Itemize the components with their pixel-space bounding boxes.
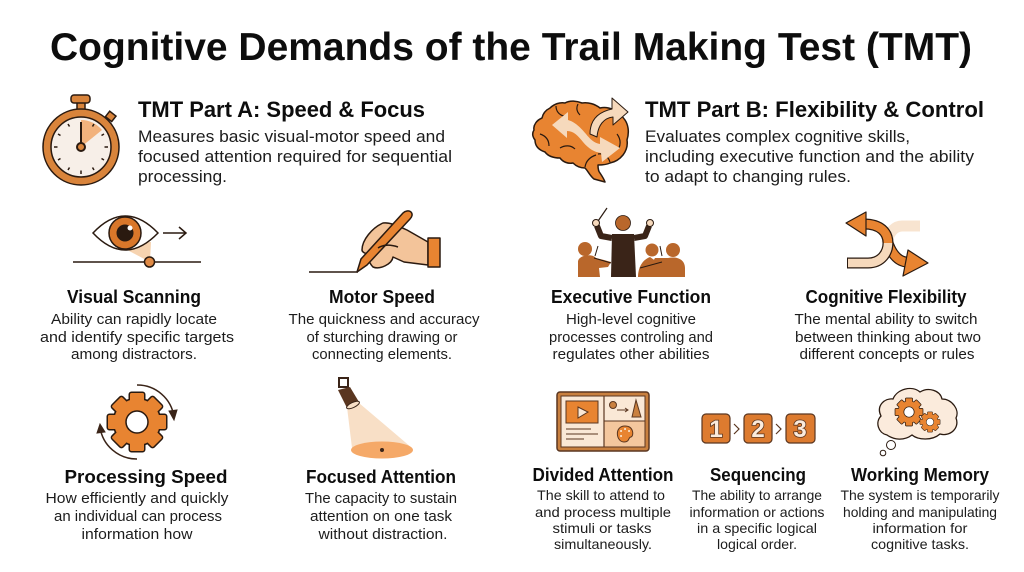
text: Part A description: processing. [138,168,227,186]
card: Working Memory [840,465,1000,552]
card: Divided Attention [532,465,674,552]
card: Sequencing [690,465,824,552]
card: Cognitive Flexibility [794,287,981,363]
card: Sequencing: Sequencing [710,465,806,485]
card: Cognitive Flexibility: different concepts or rules [800,347,974,363]
title: Cognitive Demands of the Trail Making Test (TMT) [50,26,972,69]
text: Part A description [138,128,452,186]
card: Motor Speed [288,287,480,363]
card: Divided Attention: stimuli or tasks [552,520,652,536]
icon: multitasking screen [557,392,649,451]
card: Executive Function: regulates other abilities [552,347,710,363]
card: Divided Attention: Divided Attention [532,465,674,485]
card: Visual Scanning: among distractors. [71,347,197,363]
card: Working Memory: cognitive tasks. [871,536,969,552]
card: Visual Scanning [40,287,234,363]
icon: brain with crossing arrows [533,98,628,182]
card: Cognitive Flexibility: between thinking about two [795,330,981,346]
card: Cognitive Flexibility: The mental ability to switch [794,312,978,328]
card: Visual Scanning: Visual Scanning [67,287,201,307]
card: Motor Speed: of sturching drawing or [306,330,458,346]
card: Processing Speed: How efficiently and quickly [46,491,229,507]
card: Visual Scanning: and identify specific targets [40,330,234,346]
card: Divided Attention: and process multiple [535,504,671,520]
text: Part A description: Measures basic visual-motor speed and [138,128,445,146]
card: Cognitive Flexibility: Cognitive Flexibility [806,287,966,307]
card: Sequencing: in a specific logical [697,520,817,536]
icon: eye scanning a line [73,216,201,267]
text: Part B description: Evaluates complex cognitive skills, [645,128,910,146]
card: Processing Speed: information how [82,527,193,543]
icon: spotlight [338,378,413,458]
icon: stopwatch [43,95,119,185]
card: Processing Speed: an individual can process [54,509,222,525]
heading: TMT Part B: TMT Part B: Flexibility & Control [645,97,984,122]
card: Executive Function: High-level cognitive [566,312,696,328]
icon: numbered sequence: 3 [793,416,807,443]
card: Motor Speed: Motor Speed [329,287,435,307]
heading: TMT Part A: TMT Part A: Speed & Focus [138,97,425,122]
card: Motor Speed: connecting elements. [312,347,452,363]
card: Working Memory: information for [872,520,968,536]
card: Focused Attention: attention on one task [310,509,453,525]
card: Divided Attention: The skill to attend to [537,487,665,503]
card: Working Memory: The system is temporarily [840,487,1000,503]
icon: thought cloud with gears [878,388,957,456]
card: Sequencing: The ability to arrange [692,487,822,503]
card: Focused Attention: Focused Attention [306,467,456,487]
card: Sequencing: information or actions [690,504,824,520]
card: Motor Speed: The quickness and accuracy [288,312,480,328]
card: Focused Attention: without distraction. [317,527,448,543]
card: Working Memory: Working Memory [851,465,989,485]
icon: numbered sequence [702,414,815,443]
text: Part A description: focused attention required for sequential [138,148,452,166]
card: Executive Function: Executive Function [551,287,711,307]
card: Focused Attention [305,467,457,543]
icon: orchestra conductor [578,208,685,277]
icon: hand drawing with pen [309,211,440,272]
card: Sequencing: logical order. [717,536,797,552]
card: Focused Attention: The capacity to sustain [305,491,457,507]
card: Executive Function: processes controling and [549,330,713,346]
card: Divided Attention: simultaneously. [554,536,652,552]
text: Part B description [645,128,975,186]
card: Visual Scanning: Ability can rapidly locate [51,312,217,328]
icon: crossing arrows [846,212,928,276]
text: Part B description: including executive function and the ability [645,148,975,166]
icon: numbered sequence: 1 [709,416,723,443]
card: Executive Function [549,287,713,363]
card: Working Memory: holding and manipulating [843,504,997,520]
card: Processing Speed [46,467,229,543]
icon: numbered sequence: 2 [751,416,765,443]
card: Processing Speed: Processing Speed [64,467,228,487]
icon: gear with rotation arrows [97,385,177,459]
text: Part B description: to adapt to changing rules. [645,168,851,186]
